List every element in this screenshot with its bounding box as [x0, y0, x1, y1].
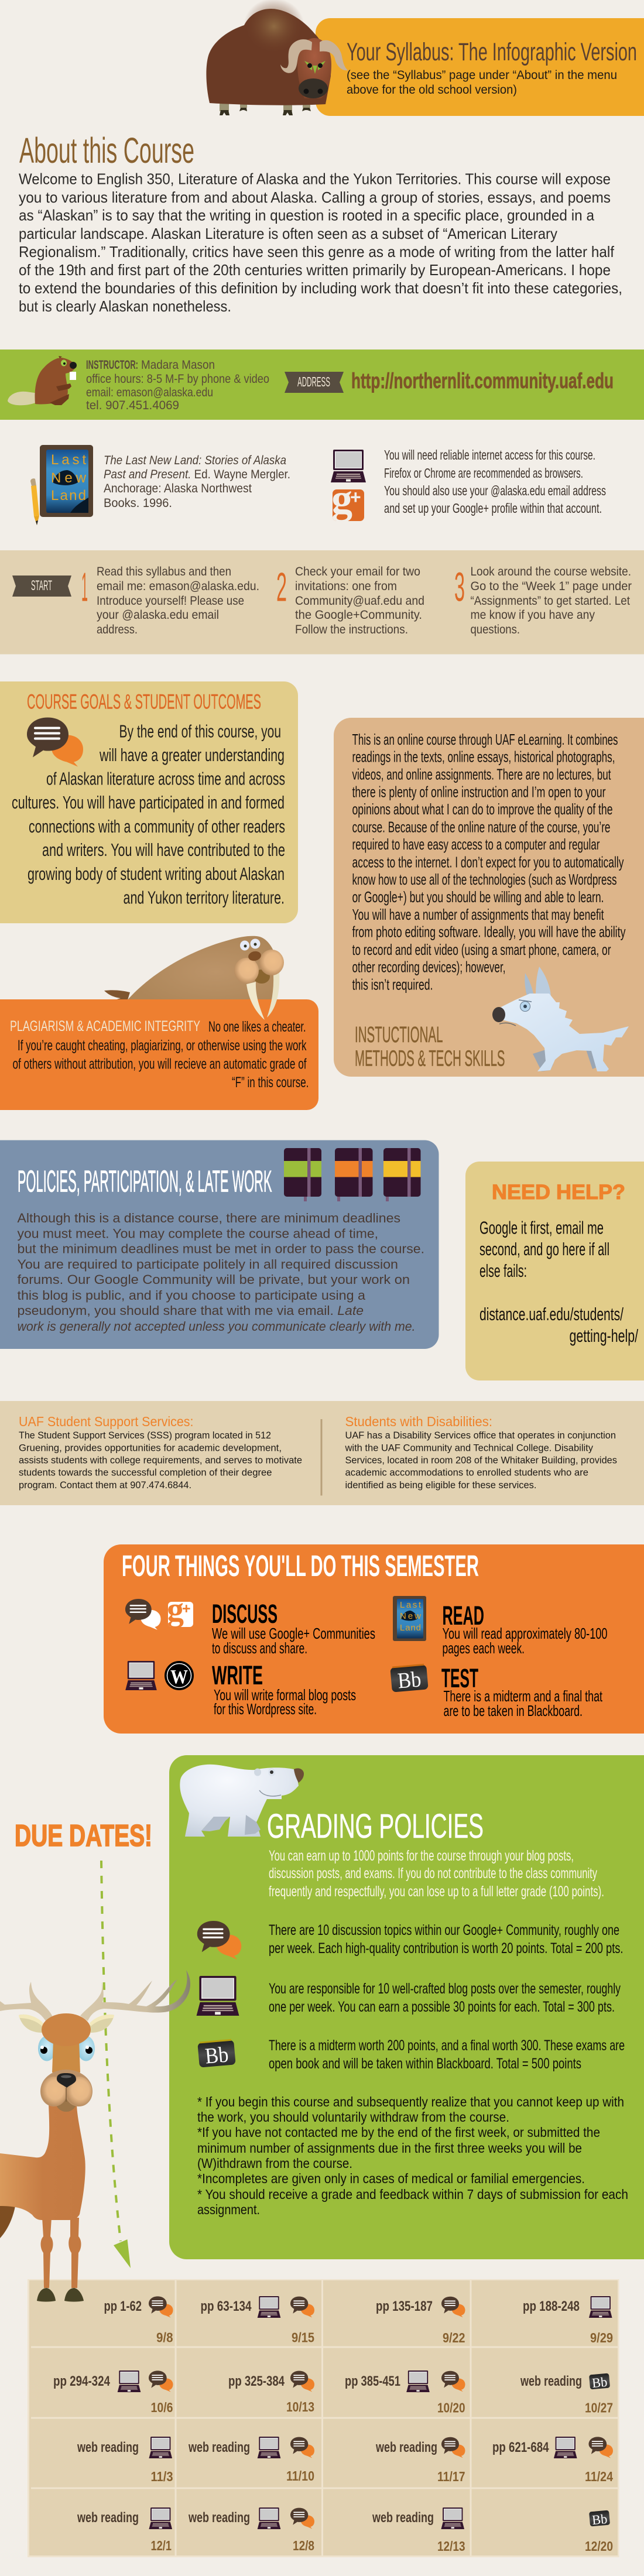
icon: google plus: + — [350, 487, 361, 508]
policies paragraph: You are required to participate politely in all required discussion — [18, 1257, 398, 1272]
week 12/13 — [372, 2508, 465, 2554]
step 2: Follow the instructions. — [295, 623, 408, 636]
heading: due dates: DUE DATES! — [15, 1819, 152, 1853]
need help text: else fails: — [479, 1260, 527, 1281]
grading footnotes: *If you have not contacted me by the end of the first week, or submitted the — [197, 2125, 600, 2140]
about paragraph: you to various literature from and about Alaska. Calling a group of stories, essays, and poems — [19, 189, 611, 206]
about paragraph: as “Alaskan” is to say that the writing in question is rooted in a specific place, grounded in a — [19, 206, 594, 224]
step 3 — [454, 564, 632, 636]
step 3: questions. — [471, 623, 520, 636]
required text citation: Anchorage: Alaska Northwest — [104, 482, 252, 495]
student support services — [19, 1414, 302, 1491]
icon: course book: Land — [51, 488, 86, 503]
panel: support services band — [0, 1401, 644, 1505]
icon: laptop — [197, 1976, 239, 2016]
instructor details: Madara Mason — [141, 358, 215, 372]
students with disabilities: UAF has a Disability Services office that operates in conjunction — [345, 1430, 616, 1441]
required text citation: Past and Present. Ed. Wayne Mergler. — [104, 468, 290, 481]
week 11/17: 11/17 — [437, 2469, 465, 2484]
step 2: Community@uaf.edu and — [295, 594, 424, 608]
panel: plagiarism — [0, 999, 318, 1110]
week 12/13: 12/13 — [437, 2539, 465, 2554]
item: test: TEST — [441, 1663, 478, 1693]
students with disabilities: Students with Disabilities: — [345, 1414, 492, 1429]
student support services: students towards the successful completion of their degree — [19, 1467, 272, 1478]
instructional text: this isn’t required. — [352, 975, 433, 993]
students with disabilities: academic accommodations to enrolled students who are — [345, 1467, 588, 1478]
week 11/10: web reading — [188, 2440, 250, 2455]
ribbon: start — [12, 576, 71, 597]
heading: need help: NEED HELP? — [492, 1181, 625, 1204]
student support services: assists students with college requirements, and serves to motivate — [19, 1455, 302, 1466]
week 9/15 — [200, 2296, 314, 2345]
exam points — [269, 2037, 625, 2072]
week 9/29 — [523, 2296, 613, 2345]
students with disabilities: Services, located in room 208 of the Whitaker Building, provides — [345, 1455, 617, 1466]
grading intro — [269, 1848, 604, 1900]
icon: beaver — [8, 356, 77, 405]
week 12/1 — [77, 2508, 172, 2553]
icon: course book: New — [51, 470, 87, 486]
icon: yellow notebook — [383, 1148, 420, 1201]
week 9/22: 9/22 — [443, 2330, 465, 2345]
item: write — [212, 1660, 356, 1718]
week 9/22 — [376, 2297, 465, 2345]
policies paragraph: you must meet. You may complete the course ahead of time, — [18, 1226, 378, 1241]
need help text — [479, 1218, 638, 1346]
step 2 — [276, 564, 424, 636]
week 9/8: 9/8 — [156, 2330, 173, 2345]
students with disabilities — [344, 1414, 617, 1491]
week 11/3 — [77, 2437, 173, 2484]
icon: wordpress — [165, 1661, 194, 1690]
week 10/13 — [228, 2371, 314, 2414]
week 12/1: web reading — [77, 2510, 139, 2526]
icon: google plus white — [168, 1602, 193, 1627]
policies paragraph: this blog is public, and if you choose to participate using a — [18, 1288, 366, 1303]
icon: musk ox — [206, 0, 348, 115]
item: test — [441, 1663, 603, 1719]
week 12/20 — [585, 2510, 613, 2554]
goals paragraph: and Yukon territory literature. — [123, 888, 285, 907]
panel: course goals — [0, 681, 298, 923]
students with disabilities: identified as being eligible for these services. — [345, 1480, 536, 1491]
item: discuss: We will use Google+ Communities — [212, 1625, 375, 1642]
step 1: your @alaska.edu email — [97, 608, 219, 622]
item: read: READ — [443, 1601, 484, 1630]
week 10/27: 10/27 — [585, 2400, 613, 2416]
icon: chat bubbles white — [125, 1599, 161, 1630]
week 10/13: pp 325-384 — [228, 2373, 285, 2389]
subtitle text — [347, 68, 617, 97]
step 2: 2 — [276, 564, 287, 610]
student support services: The Student Support Services (SSS) program located in 512 — [19, 1430, 271, 1441]
plagiarism text: “F” in this course. — [232, 1074, 309, 1091]
item: test: are to be taken in Blackboard. — [444, 1702, 583, 1719]
item: discuss: to discuss and share. — [212, 1639, 307, 1657]
goals paragraph: cultures. You will have participated in and formed — [12, 792, 285, 813]
plagiarism text: of others without attribution, you will recieve an automatic grade of — [13, 1056, 307, 1073]
icon: walrus body — [104, 936, 275, 1001]
icon: chat bubbles — [27, 718, 83, 767]
icon: course book — [40, 445, 93, 517]
instructor details: INSTRUCTOR: — [86, 358, 138, 372]
step 2: the Google+Community. — [295, 608, 422, 622]
icon: google plus white: g — [167, 1590, 184, 1628]
icon: book small: Last — [400, 1600, 422, 1610]
policies paragraph: pseudonym, you should share that with me via email. Late — [18, 1303, 364, 1318]
required text citation — [104, 454, 290, 510]
subtitle text: above for the old school version) — [347, 83, 517, 97]
about paragraph: particular landscape. Alaskan Literature is often seen as a subset of “American Literary — [19, 225, 557, 242]
heading: course goals: COURSE GOALS & STUDENT OUTCOMES — [27, 691, 261, 713]
panel: schedule grid — [28, 2279, 619, 2557]
heading: grading policies: GRADING POLICIES — [267, 1807, 484, 1845]
step 3: “Assignments” to get started. Let — [471, 594, 630, 608]
icon: blackboard: Bb — [397, 1667, 422, 1694]
required text citation: Books. 1996. — [104, 496, 172, 510]
week 10/20: pp 385-451 — [345, 2373, 400, 2389]
policies paragraph: Although this is a distance course, there are minimum deadlines — [18, 1211, 400, 1225]
week 10/27: web reading — [520, 2373, 582, 2389]
goals paragraph: will have a greater understanding — [99, 745, 285, 765]
step 3: Look around the course website. — [471, 565, 631, 578]
goals paragraph: of Alaskan literature across time and across — [46, 768, 285, 789]
icon: reindeer — [0, 1970, 190, 2302]
week 9/8 — [104, 2296, 173, 2345]
step 1: Introduce yourself! Please use — [97, 594, 244, 608]
step 1: email me: emason@alaska.edu. — [97, 580, 259, 593]
icon: pencil — [30, 478, 39, 525]
step 1 — [81, 564, 259, 636]
item: discuss: DISCUSS — [212, 1599, 278, 1629]
goals paragraph — [12, 721, 285, 907]
step 1: address. — [97, 623, 138, 636]
panel: need help — [465, 1162, 644, 1381]
grading footnotes: the work, you should voluntarily withdraw from the course. — [197, 2109, 509, 2125]
policies paragraph: work is generally not accepted unless you communicate clearly with me. — [18, 1319, 416, 1334]
week 10/13: 10/13 — [286, 2399, 314, 2414]
week 12/20: Bb — [591, 2512, 608, 2527]
about paragraph — [19, 170, 622, 315]
icon: book small: New — [400, 1611, 421, 1621]
week 12/8 — [188, 2508, 314, 2553]
step 2: invitations: one from — [295, 580, 397, 593]
instructor details: tel. 907.451.4069 — [86, 399, 179, 412]
week 12/13: web reading — [372, 2510, 434, 2526]
week 9/15: pp 63-134 — [200, 2298, 252, 2314]
required text citation: The Last New Land: Stories of Alaska — [104, 454, 286, 467]
icon: google plus — [333, 489, 364, 521]
week 9/15: 9/15 — [292, 2330, 314, 2345]
week 9/8: pp 1-62 — [104, 2298, 142, 2314]
week 10/20 — [345, 2371, 465, 2416]
panel: policies — [0, 1140, 439, 1349]
step 3: me know if you have any — [471, 608, 595, 622]
student support services: Gruening, provides opportunities for academic development, — [19, 1443, 282, 1453]
icon: blackboard: Bb — [204, 2042, 229, 2069]
title banner — [316, 18, 644, 116]
ribbon: start: START — [31, 578, 52, 594]
about paragraph: Regionalism.” Traditionally, critics have seen this genre as a mode of writing from the latter half — [19, 243, 615, 261]
panel: instructor band — [0, 350, 644, 420]
icon: orange notebook — [335, 1148, 372, 1201]
week 11/24 — [492, 2437, 613, 2484]
icon: wordpress: W — [170, 1666, 188, 1688]
icon: laptop — [331, 450, 366, 482]
item: write: You will write formal blog posts — [214, 1686, 356, 1704]
goals paragraph: connections with a community of other readers — [29, 816, 285, 837]
instructional text — [352, 731, 625, 993]
icon: course book: Last — [51, 452, 86, 468]
step 3: Go to the “Week 1” page under — [471, 580, 632, 593]
about paragraph: of the 19th and first part of the 20th centuries written primarily by European-Americans. I hope — [19, 261, 611, 279]
policies paragraph — [18, 1211, 424, 1334]
about paragraph: but is clearly Alaskan nonetheless. — [19, 297, 231, 315]
week 11/24: pp 621-684 — [492, 2440, 549, 2455]
instructional text: other recording devices); however, — [352, 958, 506, 975]
week 10/27 — [520, 2373, 613, 2416]
discussion points — [269, 1922, 623, 1957]
heading: instructional methods — [355, 1023, 505, 1071]
item: write: WRITE — [212, 1660, 263, 1690]
icon: chat bubbles — [197, 1921, 241, 1960]
technology requirements text — [384, 447, 606, 516]
icon: walrus face and tusks — [234, 939, 284, 1020]
policies paragraph: but the minimum deadlines must be met in order to pass the course. — [18, 1241, 424, 1256]
plagiarism text: No one likes a cheater. — [208, 1019, 306, 1035]
instructor details: office hours: 8-5 M-F by phone & video — [86, 372, 269, 386]
week 9/22: pp 135-187 — [376, 2298, 433, 2314]
blog post points — [269, 1981, 621, 2015]
student support services: program. Contact them at 907.474.6844. — [19, 1480, 191, 1491]
week 11/10: 11/10 — [286, 2468, 314, 2483]
week 12/8: 12/8 — [293, 2538, 314, 2553]
week 11/3: 11/3 — [151, 2469, 173, 2484]
icon: laptop orange panel — [125, 1661, 157, 1690]
week 9/29: pp 188-248 — [523, 2298, 580, 2314]
week 10/27: Bb — [591, 2375, 608, 2390]
week 10/6: 10/6 — [151, 2400, 173, 2415]
icon: blackboard — [390, 1663, 429, 1694]
week 9/29: 9/29 — [590, 2330, 613, 2345]
icon: google plus white: + — [182, 1601, 191, 1617]
heading: instructional methods: METHODS & TECH SKILLS — [355, 1047, 505, 1071]
heading: about this course: About this Course — [19, 131, 194, 170]
icon: book small: Land — [400, 1623, 421, 1633]
week 11/17: web reading — [375, 2440, 437, 2455]
step 3: 3 — [454, 564, 465, 610]
icon: wolf — [492, 967, 629, 1071]
item: write: for this Wordpress site. — [214, 1700, 317, 1718]
instructor details: email: emason@alaska.edu — [86, 386, 213, 399]
week 10/6 — [53, 2371, 173, 2415]
grading footnotes: assignment. — [197, 2202, 260, 2217]
step 1: 1 — [81, 564, 88, 610]
week 10/6: pp 294-324 — [53, 2373, 111, 2389]
goals paragraph: By the end of this course, you — [119, 721, 281, 741]
icon: green notebook — [284, 1148, 321, 1201]
plagiarism text — [13, 1019, 309, 1091]
icon: google plus: g — [331, 475, 352, 522]
grading footnotes — [197, 2094, 628, 2217]
ribbon: address: ADDRESS — [297, 374, 330, 389]
icon: polar bear — [180, 1765, 304, 1837]
goals paragraph: and writers. You will have contributed to the — [42, 840, 285, 860]
grading footnotes: (W)ithdrawn from the course. — [197, 2156, 352, 2171]
week 11/10 — [188, 2437, 314, 2483]
step 2: Check your email for two — [295, 565, 420, 578]
step 1: Read this syllabus and then — [97, 565, 231, 578]
week 12/20: 12/20 — [585, 2539, 613, 2554]
policies paragraph: forums. Our Google Community will be private, but your work on — [18, 1272, 410, 1287]
instructor details — [86, 358, 269, 412]
week 12/1: 12/1 — [151, 2538, 172, 2553]
student support services: UAF Student Support Services: — [19, 1414, 193, 1429]
arrow: dashed line to schedule — [101, 1861, 131, 2268]
panel: start steps band — [0, 550, 644, 655]
item: read: pages each week. — [443, 1639, 525, 1657]
grading footnotes: *Incompletes are given only in cases of medical or familial emergencies. — [197, 2171, 585, 2186]
week 11/17 — [375, 2437, 465, 2484]
panel: grading policies — [169, 1755, 644, 2259]
icon: blackboard — [197, 2039, 236, 2070]
week 10/20: 10/20 — [437, 2400, 465, 2416]
subtitle text: (see the “Syllabus” page under “About” in the menu — [347, 68, 617, 82]
panel: instructional methods — [334, 718, 644, 1077]
panel: four things — [104, 1544, 644, 1734]
week 12/8: web reading — [188, 2510, 250, 2526]
week 11/24: 11/24 — [585, 2469, 613, 2484]
week 11/3: web reading — [77, 2440, 139, 2455]
panel: policies: POLICIES, PARTICIPATION, & LATE WORK — [18, 1165, 272, 1199]
plagiarism text: If you’re caught cheating, plagiarizing, or otherwise using the work — [18, 1037, 307, 1054]
item: discuss — [212, 1599, 375, 1657]
icon: book small — [393, 1596, 426, 1641]
heading: plagiarism: PLAGIARISM & ACADEMIC INTEGRITY — [10, 1018, 200, 1034]
goals paragraph: growing body of student writing about Alaskan — [28, 864, 285, 884]
heading: instructional methods: INSTUCTIONAL — [355, 1023, 443, 1047]
students with disabilities: with the UAF Community and Technical College. Disability — [344, 1443, 594, 1453]
ribbon: address — [285, 372, 344, 393]
about paragraph: Welcome to English 350, Literature of Alaska and the Yukon Territories. This course will expose — [19, 170, 611, 187]
item: read — [443, 1601, 608, 1657]
grading footnotes: minimum number of assignments due in the first three weeks you will be — [197, 2140, 582, 2156]
